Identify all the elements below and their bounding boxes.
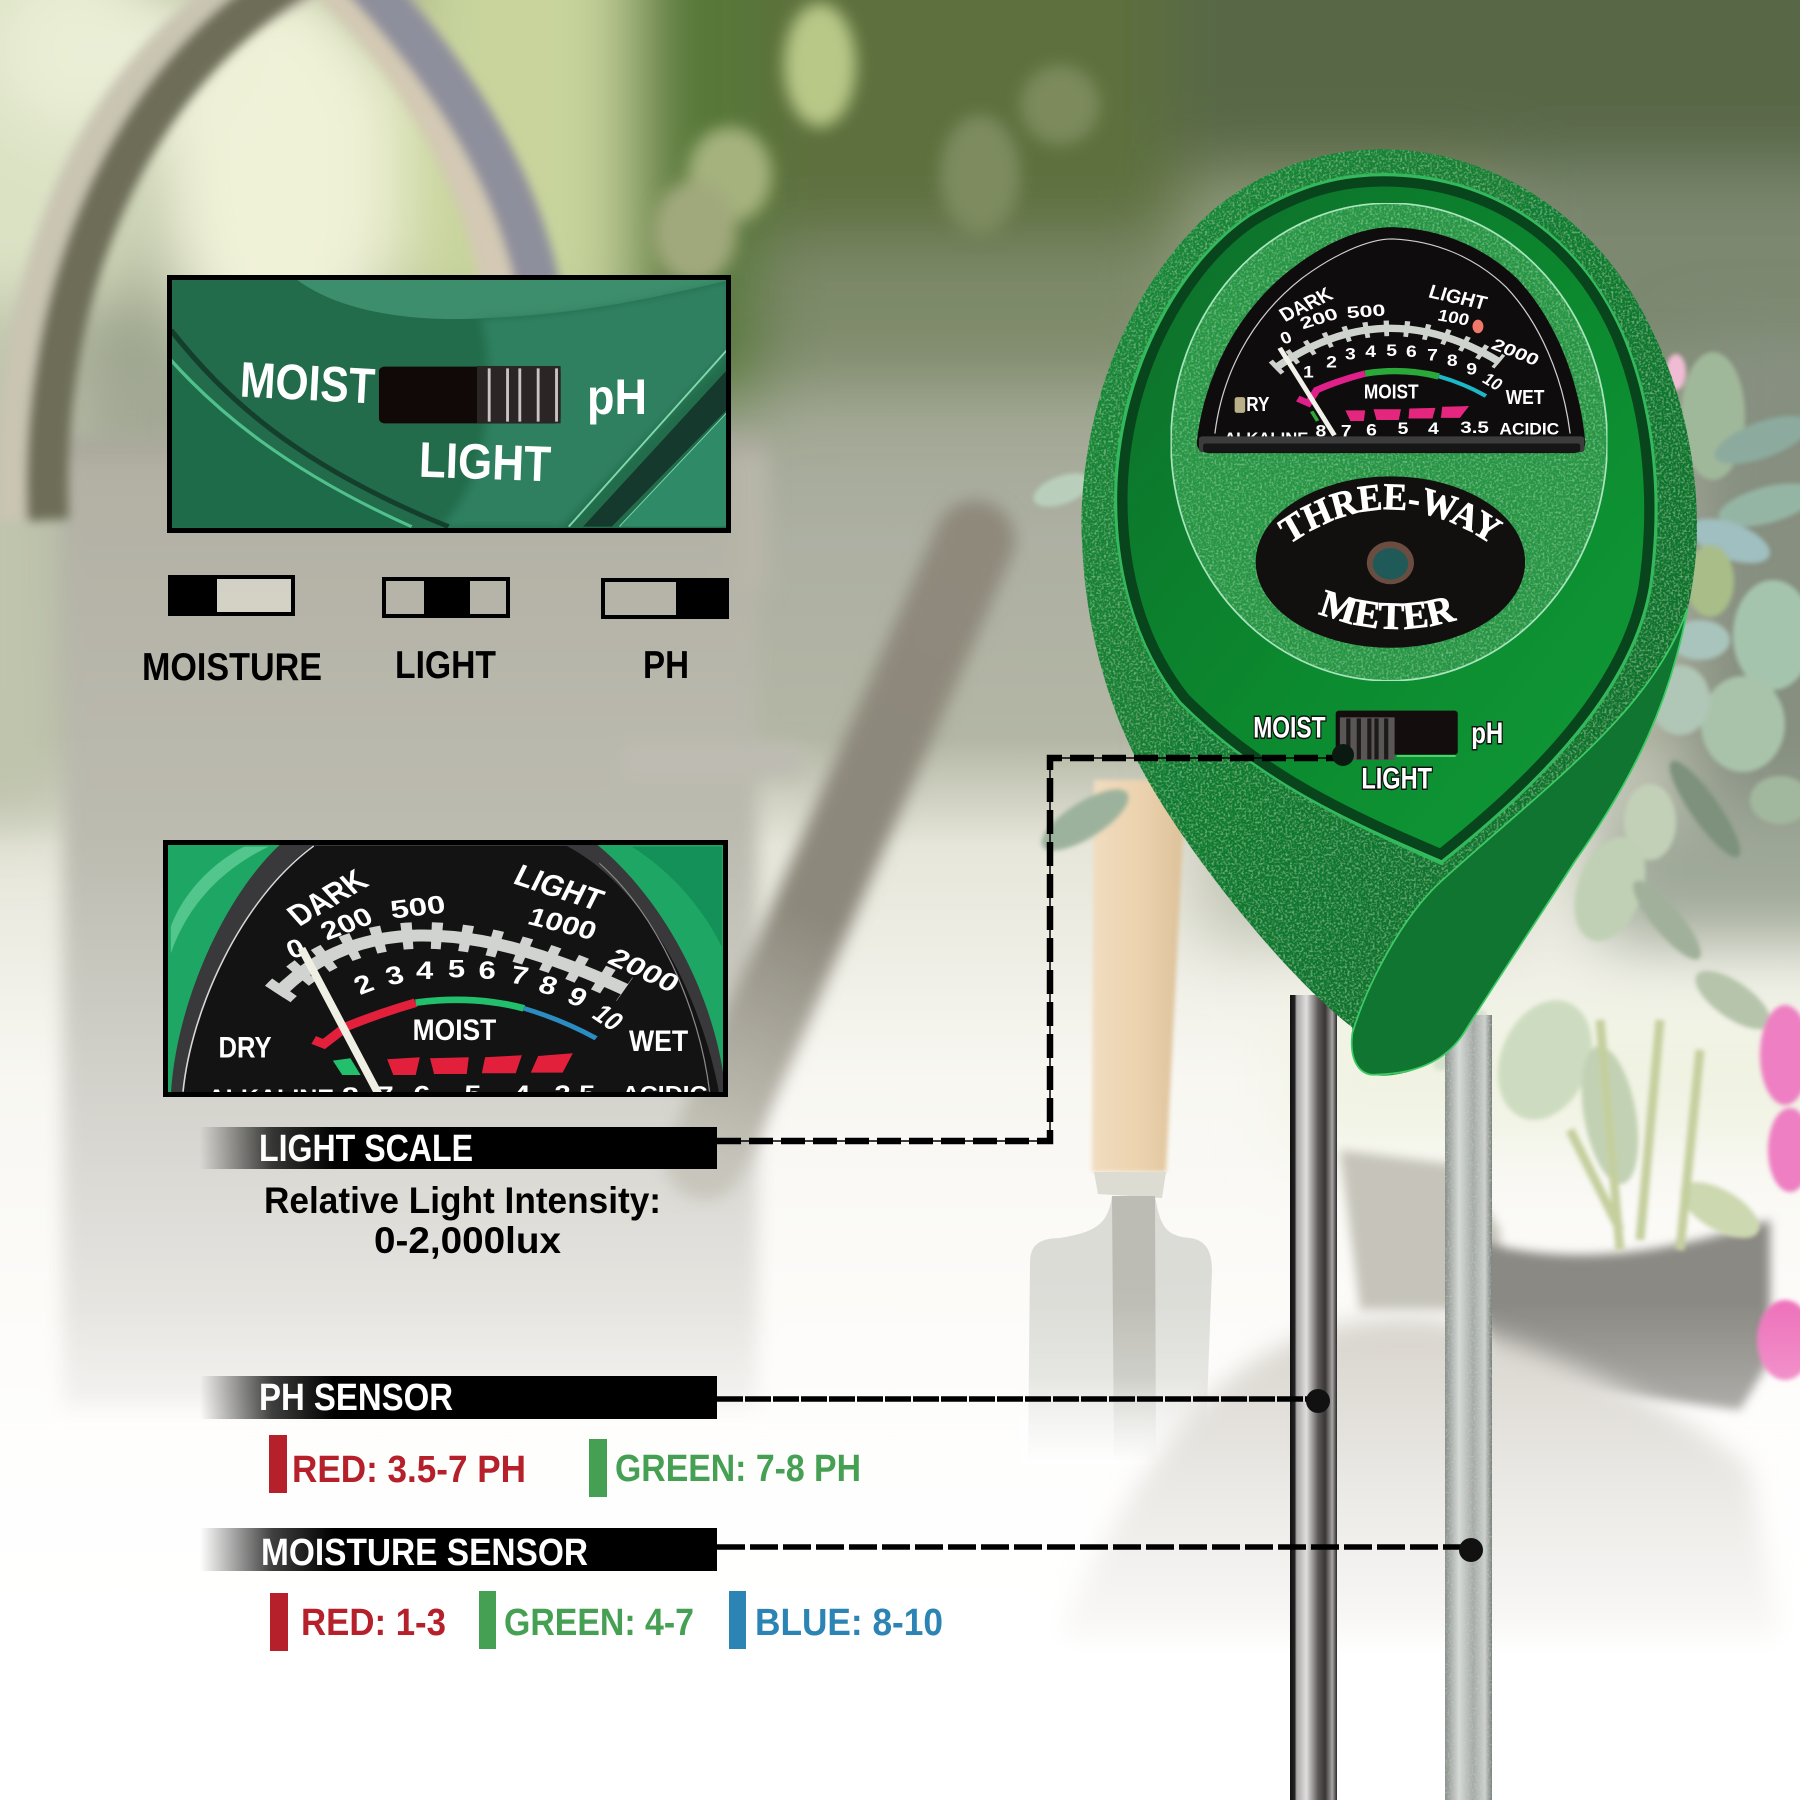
label ph: PH [643,644,689,687]
text: relative light intensity: 0-2,000lux [374,1220,561,1261]
inset dial labels: 6 [413,1080,430,1109]
dial labels: LIGHT [1426,281,1490,314]
dial labels: 200 [1297,304,1341,333]
text: relative light intensity [264,1180,661,1261]
inset pH blocks [387,1053,573,1075]
dial labels: 6 [1406,342,1417,361]
meter groove and inner region [1122,181,1649,854]
legend: ph red: RED: 3.5-7 PH [292,1449,526,1491]
background: plant leaves [1029,352,1800,1380]
inset switch ridges [477,366,561,423]
inset dial labels: 5 [464,1080,481,1108]
heading: moisture sensor: MOISTURE SENSOR [261,1532,588,1574]
label light: LIGHT [395,644,496,687]
meter right flap [1352,608,1688,1075]
switch slider [1340,717,1395,760]
can handle [31,0,545,520]
background: pot and soil [1060,1150,1780,1640]
legend: moisture red: RED: 1-3 [301,1602,446,1644]
heading: moisture sensor [200,1528,717,1574]
inset dial labels: 4 [513,1080,531,1108]
connector: light scale to switch [717,744,1354,1141]
dial pH blocks [1345,406,1469,421]
logo text: three-way: THREE-WAY [1276,484,1504,542]
dial labels: WET [1506,386,1545,409]
dial labels [1224,281,1559,447]
logo oval [1256,476,1526,648]
text: relative light intensity: Relative Light Intensity: [264,1180,661,1221]
switch position: moisture [142,575,322,689]
dial needle [1280,348,1334,435]
dial labels: 9 [1466,360,1477,378]
legend: ph green [589,1439,861,1497]
dial labels: 0 [1277,328,1295,348]
dial labels: 7 [1427,346,1438,364]
inset dial labels: 8 [342,1082,359,1110]
inset dial labels: 7 [508,960,531,990]
dial labels: 8 [1316,422,1326,440]
inset labels [242,362,644,481]
inset dial labels: 9 [563,981,593,1013]
dial labels: DARK [1275,284,1338,326]
heading: light scale: LIGHT SCALE [259,1128,473,1170]
inset dial labels: DRY [219,1032,272,1065]
dial labels: 3 [1345,345,1356,363]
dial labels: 5 [1386,342,1397,360]
dial labels: 6 [1366,421,1377,439]
background: trowel [1020,780,1220,1465]
switch position: light [384,577,508,687]
inset: dial close-up [163,840,728,1110]
right sensor probe [1445,1015,1492,1800]
dial gauge [1197,227,1585,453]
dial labels: ACIDIC [1499,420,1559,438]
legend: ph green: GREEN: 7-8 PH [615,1448,861,1490]
dial moisture arc [1298,371,1486,403]
inset: switch close-up [167,275,731,533]
soil meter body [1081,149,1697,1076]
dial labels: 2000 [1488,335,1543,369]
legend: moisture green: GREEN: 4-7 [504,1602,694,1644]
inset dial labels: 7 [376,1081,394,1110]
inset dial labels: 200 [315,901,378,945]
heading: ph sensor [200,1376,717,1419]
inset dial labels [208,859,708,1110]
heading: light scale [200,1127,717,1170]
legend: moisture red [270,1593,446,1651]
dial labels: 4 [1428,419,1439,438]
inset dial labels: WET [629,1025,689,1058]
inset dial labels: LIGHT [508,859,609,918]
dial labels: 4 [1365,342,1376,361]
meter inner teardrop [1116,174,1656,863]
heading: ph sensor: PH SENSOR [259,1377,453,1419]
dial labels: 3.5 [1460,418,1489,437]
inset moisture arc [314,1000,596,1044]
inset dial labels: 8 [535,969,562,1001]
inset dial labels: 5 [448,954,465,983]
inset labels: LIGHT [418,432,552,492]
inset switch slot [379,367,561,423]
dial labels: 100 [1436,306,1471,329]
dial labels: ALKALINE [1224,429,1308,447]
label moisture: MOISTURE [142,646,322,689]
dial labels: 1 [1303,363,1314,381]
mode switch on meter: pH [1471,718,1503,750]
inset dial labels: 2 [348,968,379,1000]
inset dial labels: ACIDIC [622,1083,708,1107]
inset labels: pH [587,369,647,425]
mode switch on meter [1253,711,1503,796]
inset dial labels: 6 [479,956,496,984]
dial labels: 10 [1479,370,1507,394]
dial light scale [1275,328,1500,369]
meter outer shell [1081,149,1697,1076]
inset dial labels: 1000 [524,901,601,945]
mode switch on meter: LIGHT [1361,763,1433,796]
meter face oval [1171,203,1607,681]
dial labels: RY [1246,393,1270,416]
inset dial labels: 3.5 [554,1080,595,1108]
connector: moisture sensor [717,1538,1483,1562]
inset dial labels: DARK [281,864,375,933]
logo emblem [1367,541,1414,584]
inset light scale [278,935,625,994]
background: right foliage backdrop [1200,340,1800,1140]
inset dial labels: 3 [382,959,407,991]
inset labels: MOIST [239,352,376,414]
switch position: ph [603,578,729,687]
dial labels: MOIST [1364,380,1419,403]
inset dial labels: MOIST [413,1014,497,1047]
legend: ph red [269,1435,526,1493]
legend: moisture blue [729,1591,943,1649]
inset dial labels: 2000 [603,942,686,998]
inset dial labels: ALKALINE [208,1086,334,1110]
background: green bokeh foliage [0,0,1800,820]
logo text: meter: METER [1318,590,1458,630]
mode switch on meter: MOIST [1253,712,1326,745]
connector: ph sensor [717,1389,1330,1413]
background: bokeh circles [653,3,1100,284]
inset dial needle [301,948,379,1095]
inset dial labels: 500 [388,889,447,924]
legend: moisture blue: BLUE: 8-10 [755,1602,943,1644]
inset dial labels: 0 [281,932,309,964]
inset dial labels: 4 [416,956,434,984]
dial labels: 2 [1326,353,1337,371]
inset dial labels: 10 [586,999,631,1036]
legend: moisture green [479,1591,694,1649]
dial labels: 8 [1447,351,1458,369]
left sensor probe [1290,995,1337,1800]
dial labels: 7 [1341,422,1352,440]
dial labels: 500 [1346,301,1386,322]
dial labels: 5 [1398,419,1408,438]
background: watering can [31,0,975,1406]
